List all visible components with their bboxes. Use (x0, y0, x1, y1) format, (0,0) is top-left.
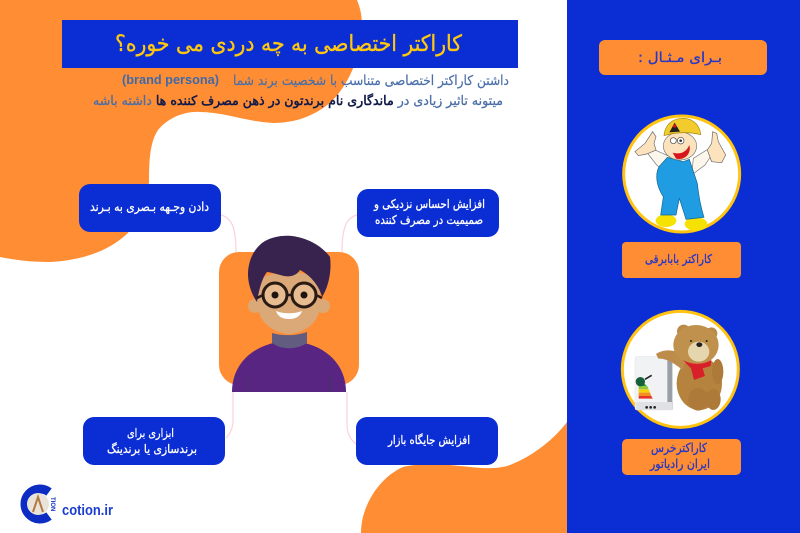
card: market position (356, 417, 498, 465)
card: market position: افزایش جایگاه بازار (387, 433, 470, 448)
card: branding tool: ابزاری برای (127, 426, 174, 441)
sleeves and arms (645, 150, 670, 173)
title text: کاراکتر اختصاصی به چه دردی می خوره؟ (115, 31, 462, 57)
label: Iran Radiator bear character (622, 439, 741, 475)
label: Baba Barghi character (622, 242, 741, 278)
red scarf (683, 360, 711, 380)
hair (248, 236, 331, 302)
label: Iran Radiator bear character: کاراکترخرس (651, 440, 707, 456)
title banner (62, 20, 518, 68)
brand persona term: (brand persona) (122, 72, 219, 87)
panel: right blue sidebar (567, 0, 800, 533)
button: for example: بـرای مـثـال : (638, 50, 722, 66)
mouth (673, 145, 690, 159)
circle frame (622, 311, 738, 427)
card: closeness and intimacy: افزایش احساس نزدیکی و (373, 197, 485, 212)
smile (276, 311, 302, 319)
bear arm (656, 350, 686, 370)
orange background blob: bottom right (361, 422, 567, 533)
sweater (232, 341, 346, 392)
circle frame (624, 116, 740, 232)
card: branding tool (83, 417, 225, 465)
intro paragraph (93, 72, 509, 109)
intro line two: میتونه تاثیر زیادی در ماندگاری نام برندتون در ذهن مصرف کننده ها داشته باشه (93, 93, 503, 109)
logo small letters: TION (49, 497, 55, 511)
orange square backdrop (219, 252, 359, 385)
face (258, 272, 320, 334)
energy label (640, 383, 647, 386)
logo C ring (25, 489, 49, 519)
orange background blob: top left (0, 0, 362, 262)
central character illustration (219, 236, 359, 392)
label: Baba Barghi character: کاراکتر بابابرقی (645, 252, 712, 267)
connector lines (221, 215, 357, 444)
card: visual identity (79, 184, 221, 232)
label: Iran Radiator bear character: ایران رادیاتور (649, 456, 710, 472)
overalls (657, 157, 704, 219)
example one: builder mascot (624, 116, 740, 232)
head (663, 132, 697, 160)
card: closeness and intimacy (357, 189, 499, 237)
ears (248, 299, 262, 313)
hard hat (664, 118, 701, 136)
intro line one: داشتن کاراکتر اختصاصی متناسب با شخصیت برند شما (233, 73, 509, 89)
radiator (635, 357, 672, 410)
button: for example (599, 40, 767, 75)
bear body (677, 357, 722, 410)
card: branding tool: برندسازی یا برندینگ (107, 442, 197, 457)
muzzle (688, 342, 709, 362)
bear legs (688, 388, 708, 411)
eye (670, 138, 676, 144)
bear head (673, 325, 719, 365)
bear ears (677, 325, 690, 338)
shoes (656, 214, 676, 227)
logo wordmark: cotion.ir (62, 502, 113, 519)
glasses (263, 283, 316, 307)
example two: bear mascot (622, 311, 738, 427)
card: visual identity: دادن وجـهه بـصری به بـرند (90, 199, 209, 215)
logo: cotion.ir (25, 489, 113, 519)
hands (635, 132, 656, 156)
turtleneck (272, 332, 307, 348)
card: closeness and intimacy: صمیمیت در مصرف کننده (375, 213, 483, 228)
